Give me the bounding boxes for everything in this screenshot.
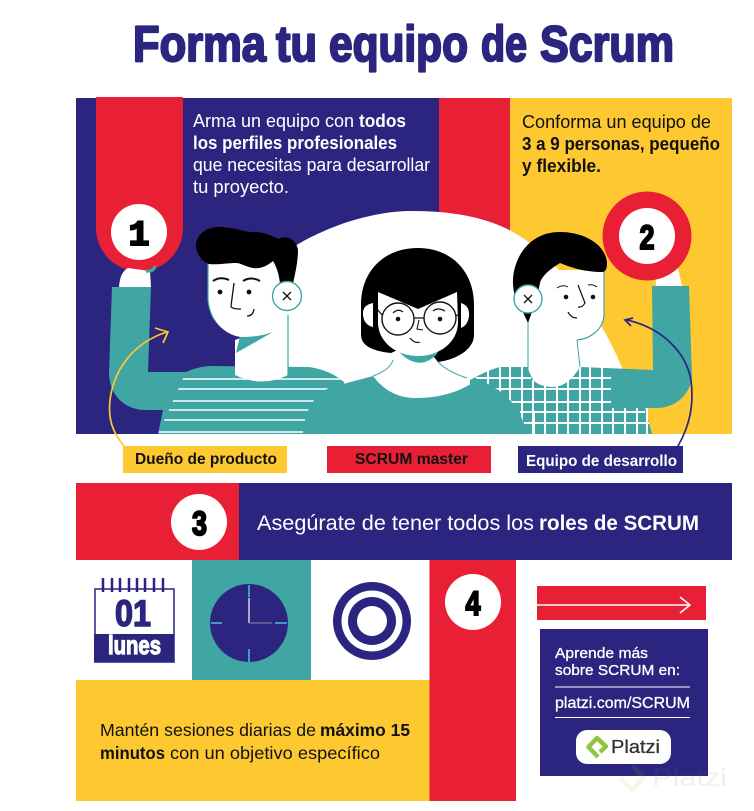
red tab with number 1 xyxy=(96,97,183,271)
watermark xyxy=(620,764,727,792)
text block: step 2: y flexible. xyxy=(522,156,601,176)
arrow: red banner xyxy=(537,586,706,620)
text block: step 2: Conforma un equipo de xyxy=(522,112,711,132)
panel: learn more: platzi.com/SCRUM xyxy=(555,695,690,712)
panel: learn more: Platzi xyxy=(611,737,660,757)
title: Scrum xyxy=(540,16,674,72)
icon: target xyxy=(333,582,411,660)
text block: step 1: todos xyxy=(359,111,406,131)
label: product owner: Dueño de producto xyxy=(135,451,277,468)
label: development team: Equipo de desarrollo xyxy=(526,453,677,470)
text block: step 2 xyxy=(522,112,720,176)
text block: step 2: 3 a 9 personas, pequeño xyxy=(522,134,720,154)
title: equipo xyxy=(329,16,468,72)
panel: step 3 band xyxy=(76,483,732,560)
text block: step 1 xyxy=(193,111,430,197)
panel: step 3 band: 3 xyxy=(192,505,207,543)
panel: learn more: sobre SCRUM en: xyxy=(555,662,680,679)
label: development team xyxy=(518,446,683,473)
label: scrum master xyxy=(327,446,491,473)
label: scrum master: SCRUM master xyxy=(355,451,468,468)
text block: step 1: tu proyecto. xyxy=(193,177,289,197)
title: tu xyxy=(276,16,317,72)
panel: daily sessions text xyxy=(76,680,430,801)
icon: calendar: lunes xyxy=(108,630,161,660)
panel: red column with number 4 xyxy=(430,560,516,801)
panel: red column with number 4: 4 xyxy=(466,585,481,623)
label: product owner xyxy=(123,446,287,473)
panel: daily sessions text: con un objetivo específico xyxy=(170,743,380,763)
panel: daily sessions text: minutos xyxy=(100,743,165,763)
panel: learn more xyxy=(540,629,708,776)
panel: team illustration background xyxy=(76,98,732,434)
illustration: product owner xyxy=(109,227,345,434)
watermark: Platzi xyxy=(652,764,727,792)
title: Forma xyxy=(133,16,267,72)
red tab with number 1: 1 xyxy=(128,216,150,256)
text block: step 1: que necesitas para desarrollar xyxy=(193,155,430,175)
panel: daily sessions text: máximo 15 xyxy=(320,720,410,740)
panel: step 3 band: roles de SCRUM xyxy=(539,512,699,535)
illustration: scrum master xyxy=(303,248,527,434)
text block: step 1: Arma un equipo con xyxy=(193,111,354,131)
icon: calendar: 01 xyxy=(115,593,151,634)
red badge with number 2: 2 xyxy=(640,219,654,257)
arrow: development team xyxy=(625,318,692,446)
icon: clock xyxy=(192,560,311,680)
panel: learn more: Aprende más xyxy=(555,645,648,662)
arrow: product owner xyxy=(110,328,168,446)
panel: step 3 band: Asegúrate de tener todos los xyxy=(257,512,534,535)
red badge with number 2 xyxy=(602,192,692,280)
text block: step 1: los perfiles profesionales xyxy=(193,133,397,153)
illustration: developer xyxy=(470,232,692,434)
panel: daily sessions text: Mantén sesiones diarias de xyxy=(100,720,316,740)
icon: calendar xyxy=(94,578,174,662)
title xyxy=(133,16,674,72)
title: de xyxy=(481,16,527,72)
